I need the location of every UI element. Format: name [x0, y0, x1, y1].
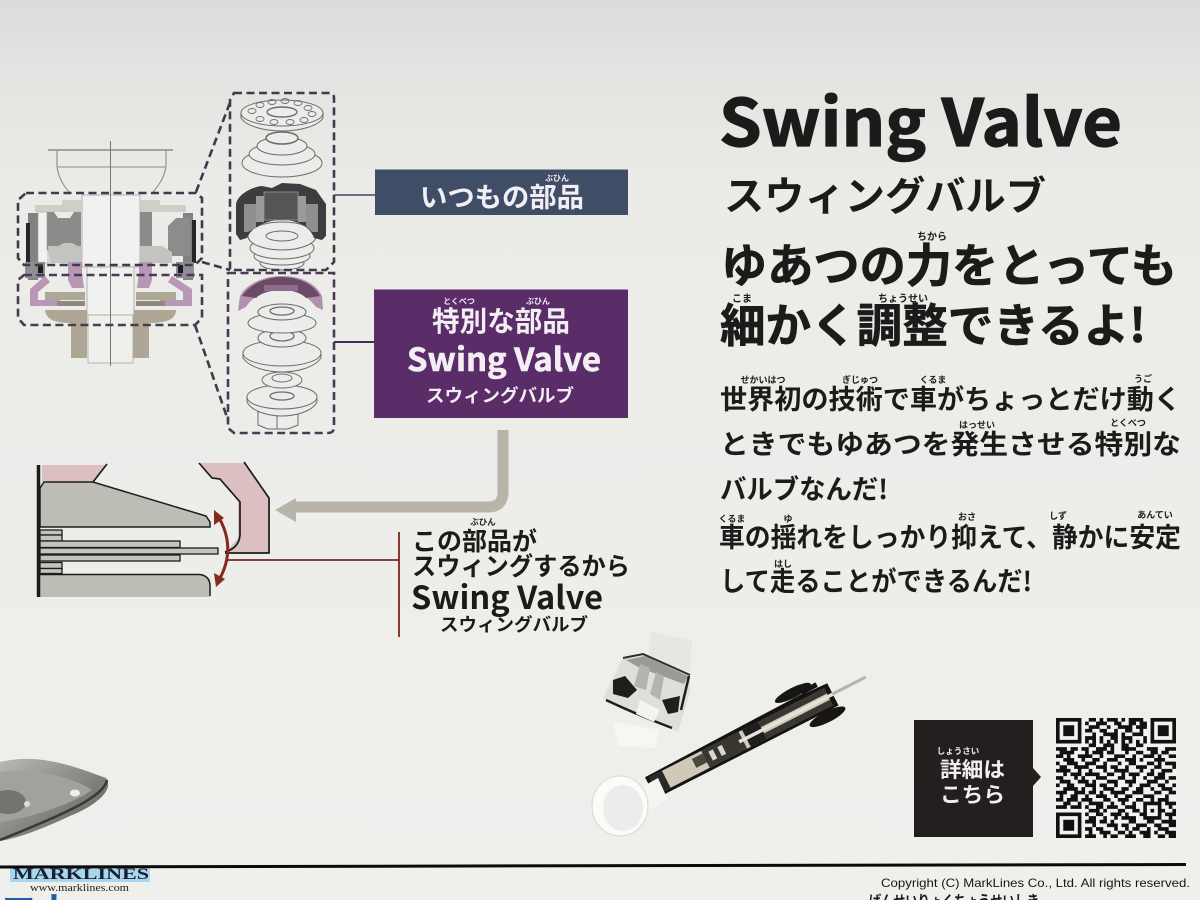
purple special part: [238, 276, 323, 311]
tagline furigana: [732, 228, 947, 305]
diagram: valve detail: [38, 462, 270, 597]
product photo: cutaway shock absorber: [639, 656, 876, 808]
body furigana: おさ: [958, 510, 976, 523]
body furigana: はし: [774, 557, 792, 570]
callout line 3: Swing Valve: [411, 573, 603, 619]
label furigana: ぶひん: [545, 173, 569, 184]
logo wordmark: MARKLINES: [13, 866, 149, 883]
body furigana: はっせい: [959, 418, 995, 431]
special parts katakana: スウィングバルブ: [426, 382, 574, 408]
body furigana: せかいはつ: [740, 373, 786, 386]
call-to-action line 1: 詳細は: [940, 754, 1005, 784]
diagram: assembly cross-section: [25, 141, 196, 366]
swing arc arrows: [214, 510, 228, 587]
title: Swing Valve: [719, 71, 1122, 222]
label text: normal parts: いつもの部品: [420, 176, 584, 215]
tagline: [720, 228, 1177, 356]
body furigana: うご: [1134, 372, 1152, 385]
call-to-action furigana: しょうさい: [937, 745, 979, 757]
special parts furigana: [443, 296, 550, 307]
arrow: to valve detail: [275, 430, 503, 522]
body furigana: くるま: [920, 373, 946, 386]
copyright notice: Copyright (C) MarkLines Co., Ltd. All rights reserved.: [881, 876, 1190, 890]
call-to-action line 2: こちら: [940, 779, 1005, 809]
special parts furigana: ぶひん: [526, 296, 550, 307]
callout line 2: スウィングするから: [412, 547, 630, 583]
valve pink body right: [200, 463, 270, 553]
label panel: normal parts: [375, 170, 628, 215]
clipped text at the bottom edge: [0, 882, 1039, 900]
body furigana: あんてい: [1137, 508, 1173, 521]
logo: MarkLines: [10, 866, 150, 894]
connector: special parts: [334, 341, 374, 343]
callout furigana: ぶひん: [470, 516, 496, 528]
body furigana: ぎじゅつ: [842, 373, 878, 386]
product photo: valve unit: [603, 632, 692, 748]
special parts name: Swing Valve: [407, 335, 601, 381]
body furigana: とくべつ: [1110, 416, 1146, 429]
footer rule: [0, 864, 1186, 867]
heading: Swing Valve: Swing Valve: [719, 71, 1122, 165]
frame: lower parts right: [228, 273, 334, 433]
lower stack: [243, 304, 321, 429]
body line 3: バルブなんだ!: [720, 468, 888, 507]
body line 4: 車の揺れをしっかり抑えて、静かに安定: [719, 516, 1181, 555]
tagline line 2: 細かく調整できるよ!: [720, 290, 1146, 356]
callout line 1: この部品が: [412, 522, 537, 558]
tagline furigana: ちょうせい: [878, 290, 928, 305]
diagram: exploded parts: [236, 98, 326, 429]
frame: lower section left: [18, 275, 202, 325]
dish photo: bottom-left part: [0, 759, 108, 841]
callout text: [411, 516, 630, 637]
frame: upper parts right: [230, 93, 334, 270]
body line 1: 世界初の技術で車がちょっとだけ動く: [720, 378, 1181, 417]
frame: upper section left: [18, 193, 202, 265]
body furigana: しず: [1049, 509, 1067, 522]
special parts text: 特別な部品: [432, 300, 570, 340]
special parts section: [30, 262, 192, 363]
valve plates: [40, 530, 218, 574]
valve axis bar: [37, 465, 40, 597]
body line 5: して走ることができるんだ!: [720, 560, 1032, 599]
tagline line 1: ゆあつの力をとっても: [721, 230, 1177, 296]
body furigana: ゆ: [783, 512, 793, 525]
dashed callout frames: [18, 93, 334, 433]
exploded parts: upper stack: [241, 98, 323, 270]
callout line 4: スウィングバルブ: [440, 611, 588, 637]
zoom guide lines: [195, 100, 231, 420]
cup outline: [48, 150, 173, 192]
dark common part: [236, 183, 326, 240]
label panel: special parts: [374, 290, 628, 418]
valve gray seat lower: [40, 574, 210, 597]
tagline furigana: こま: [732, 290, 752, 305]
connector: normal parts: [334, 194, 375, 196]
valve gray seat upper: [40, 482, 210, 527]
callout leader line: [226, 532, 399, 637]
special parts furigana: とくべつ: [443, 296, 475, 307]
QR code: [1056, 718, 1176, 838]
body furigana: [719, 372, 1173, 570]
valve pink body left: [42, 465, 107, 482]
center axis: [110, 141, 112, 366]
tagline furigana: ちから: [917, 228, 947, 243]
product photo: mount ring: [592, 776, 668, 836]
body line 2: ときでもゆあつを発生させる特別な: [720, 423, 1181, 462]
body text: [719, 372, 1181, 599]
call-to-action box: [914, 720, 1041, 837]
body furigana: くるま: [719, 512, 745, 525]
subheading: katakana name: スウィングバルブ: [724, 164, 1046, 222]
upper parts section: [25, 195, 196, 280]
logo URL: www.marklines.com: [30, 883, 129, 894]
